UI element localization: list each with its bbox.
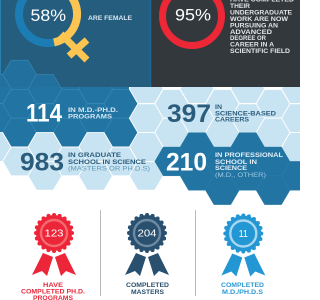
badge: Masters <box>125 212 169 276</box>
panel: female share <box>0 0 151 103</box>
icon: ribbon <box>32 212 76 276</box>
stat: 983 graduate school: (MASTERS OR PH.D.S) <box>68 166 150 173</box>
stat: 983 graduate school <box>20 148 150 176</box>
stat: 114 programs: IN M.D.-PH.D. <box>68 108 118 114</box>
caption: MD/PhD <box>221 282 265 296</box>
text block: undergraduate outcome: THEIR <box>230 3 251 10</box>
panel: advanced degree share <box>150 0 300 87</box>
panel: hexagon career stats <box>0 87 300 205</box>
label: are female: ARE FEMALE <box>88 16 132 22</box>
caption: Masters: MASTERS <box>131 289 164 296</box>
stat: 58%: 58% <box>30 6 66 25</box>
stat: 210 professional school: IN PROFESSIONAL <box>215 152 283 159</box>
stat: 397 careers: 397 <box>167 100 211 128</box>
stat: 397 careers: CAREERS <box>215 117 249 124</box>
text block: undergraduate outcome <box>230 0 295 55</box>
number: 11: 11 <box>239 229 248 240</box>
stat: 114 programs: 114 <box>26 100 62 128</box>
caption: MD/PhD: M.D./PH.D.S <box>222 289 263 296</box>
text block: undergraduate outcome: PURSUING AN <box>230 22 279 29</box>
stat: 983 graduate school: SCHOOL IN SCIENCE <box>68 159 146 166</box>
caption: PhD: COMPLETED PH.D. <box>21 288 85 295</box>
stat: 983 graduate school: IN GRADUATE <box>68 152 121 159</box>
caption: PhD: HAVE <box>43 282 63 289</box>
icon: rosette <box>129 215 165 251</box>
stat: 210 professional school: 210 <box>166 148 207 176</box>
stat: 397 careers: SCIENCE-BASED <box>215 110 277 117</box>
number: 123: 123 <box>44 228 64 239</box>
light hexagons <box>0 87 300 190</box>
badge: PhD <box>32 212 76 276</box>
text block: undergraduate outcome: DEGREE OR <box>230 35 267 42</box>
icon: ribbon <box>221 212 265 276</box>
blue hexagon band <box>0 87 138 146</box>
badge: MD/PhD <box>221 212 265 276</box>
dark hexagon cluster <box>155 133 315 205</box>
stat: 983 graduate school: 983 <box>20 148 64 176</box>
donut chart: 95 percent <box>162 0 222 46</box>
text block: undergraduate outcome: CAREER IN A <box>230 42 275 49</box>
icon: female symbol cross <box>61 34 87 60</box>
caption: Masters <box>126 282 170 296</box>
text block: undergraduate outcome: WORK ARE NOW <box>230 16 288 23</box>
hexagons on navy panel <box>0 60 62 103</box>
stat: 114 programs: PROGRAMS <box>68 114 112 120</box>
text block: undergraduate outcome: SCIENTIFIC FIELD <box>230 48 291 55</box>
stat: 397 careers: IN <box>215 104 223 111</box>
icon: ribbon <box>125 212 169 276</box>
caption: MD/PhD: COMPLETED <box>221 282 265 289</box>
dividers between badges <box>100 210 196 296</box>
stat: 210 professional school: (M.D., OTHER) <box>215 172 266 179</box>
stat: 95%: 95% <box>175 6 211 24</box>
stat: 210 professional school: SCHOOL IN <box>215 159 258 166</box>
text block: undergraduate outcome: ADVANCED <box>230 29 273 36</box>
stat: 210 professional school <box>166 148 283 179</box>
stat: 114 programs <box>26 100 118 128</box>
caption: PhD <box>21 282 85 300</box>
icon: rosette <box>225 216 261 252</box>
text block: undergraduate outcome: UNDERGRADUATE <box>230 10 292 17</box>
number: 204: 204 <box>138 228 157 239</box>
caption: Masters: COMPLETED <box>126 282 170 289</box>
stat: 397 careers <box>167 100 277 128</box>
icon: rosette <box>36 215 72 251</box>
donut chart: 58 percent <box>19 0 77 43</box>
stat: 210 professional school: SCIENCE <box>215 165 247 172</box>
